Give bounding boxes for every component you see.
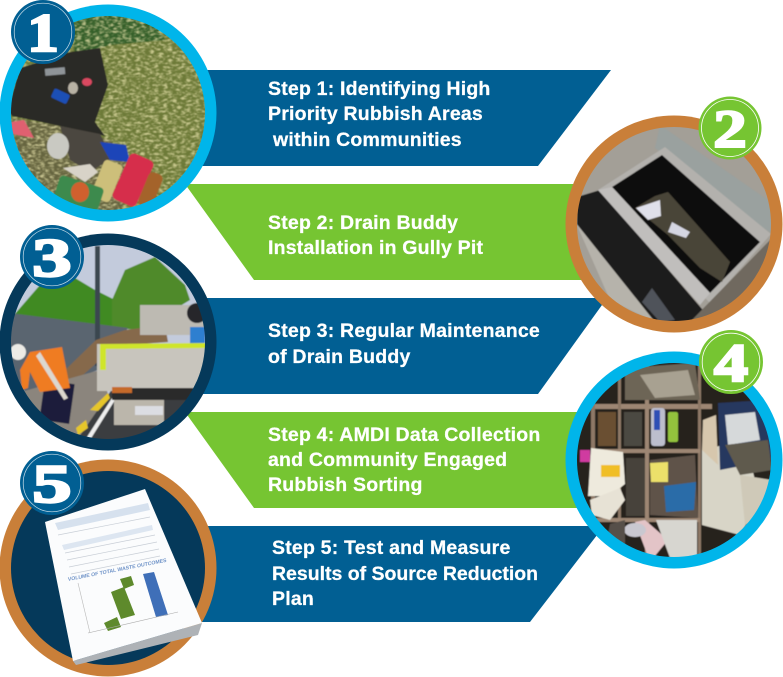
step 1 text: Priority Rubbish Areas	[268, 103, 483, 125]
banner: step 4	[185, 412, 600, 508]
step 4 text: Rubbish Sorting	[268, 474, 423, 496]
photo circle 4: sorted rubbish tray	[566, 352, 782, 570]
badge 2: 2	[713, 100, 747, 159]
step 4 text: and Community Engaged	[268, 449, 507, 471]
photo circle 3: maintenance truck and worker	[0, 234, 220, 450]
step 1 text: Step 1: Identifying High	[268, 78, 491, 100]
step 2 text: Installation in Gully Pit	[268, 237, 483, 259]
banner: step 5	[190, 526, 604, 622]
step 1 text: within Communities	[272, 129, 462, 151]
step 3 text: of Drain Buddy	[268, 346, 411, 368]
badge 1: 1	[27, 3, 59, 63]
badge 4: 4	[714, 334, 748, 393]
badge 3	[20, 225, 84, 289]
step 3 text: Step 3: Regular Maintenance	[268, 320, 540, 342]
photo circle 2: drain gully pit	[566, 116, 782, 332]
photo circle 5: report document	[0, 460, 216, 676]
step 5 text: Step 5: Test and Measure	[272, 537, 511, 559]
report page	[45, 489, 202, 665]
step 5 text: Plan	[272, 588, 314, 610]
step 2 text: Step 2: Drain Buddy	[268, 212, 458, 234]
step 5 text: Results of Source Reduction	[272, 563, 538, 585]
banner: step 2	[185, 184, 600, 280]
badge 4	[699, 330, 763, 394]
badge 5	[20, 451, 84, 515]
banner: step 1	[190, 70, 611, 166]
banner: step 3	[190, 298, 607, 394]
step 4 text: Step 4: AMDI Data Collection	[268, 424, 540, 446]
badge 2	[698, 96, 762, 160]
badge 3: 3	[32, 228, 72, 288]
report page: VOLUME OF TOTAL WASTE OUTCOMES	[68, 558, 167, 583]
badge 5: 5	[32, 454, 72, 514]
badge 1	[11, 0, 75, 64]
photo circle 1: littered grass	[0, 0, 220, 222]
